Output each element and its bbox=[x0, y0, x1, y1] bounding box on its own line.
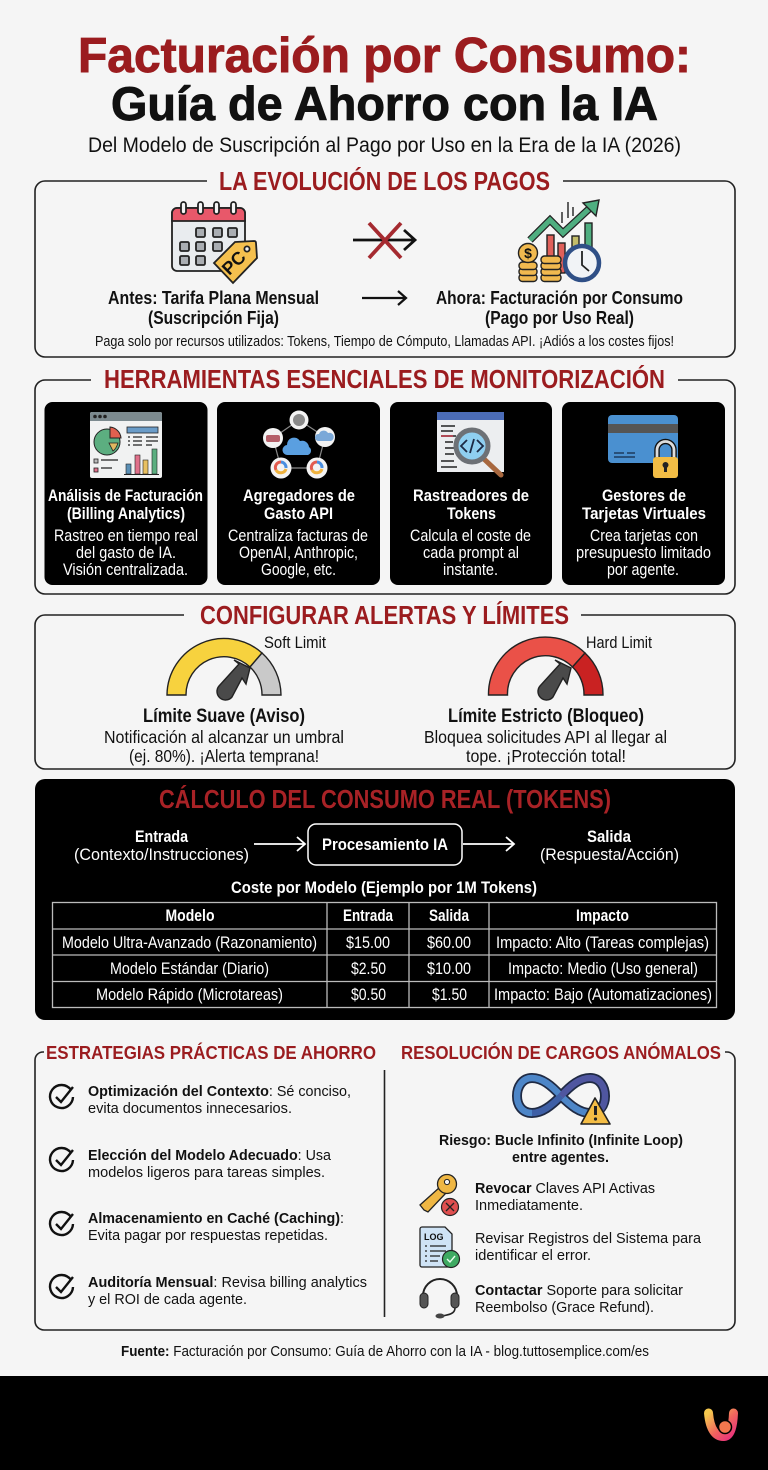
text: riesgo: Riesgo: Bucle Infinito (Infinite Loop) bbox=[439, 1132, 683, 1149]
card text: Rastreo en tiempo real bbox=[54, 527, 198, 545]
title: Guía de Ahorro con la IA bbox=[111, 77, 658, 130]
heading: evolución: LA EVOLUCIÓN DE LOS PAGOS bbox=[219, 166, 550, 196]
icon: log document bbox=[420, 1227, 460, 1268]
heading: estrategias: ESTRATEGIAS PRÁCTICAS DE AHORRO bbox=[46, 1042, 376, 1063]
flow: entrada: Entrada bbox=[135, 827, 188, 846]
card text: del gasto de IA. bbox=[76, 544, 176, 562]
table: coste por modelo bbox=[52, 902, 717, 1008]
flow: salida: Salida bbox=[587, 827, 631, 846]
label: hard limit: Hard Limit bbox=[586, 634, 652, 652]
arrow bbox=[362, 291, 406, 305]
text: ahora bbox=[436, 287, 683, 328]
text: revisar bbox=[475, 1231, 702, 1264]
heading: resolución: RESOLUCIÓN DE CARGOS ANÓMALOS bbox=[401, 1042, 721, 1063]
icon: headset bbox=[420, 1279, 459, 1318]
panel: alertas y límites bbox=[35, 601, 735, 769]
text: límite suave: Límite Suave (Aviso) bbox=[143, 705, 305, 727]
text: límite estricto bbox=[424, 705, 667, 766]
card text: Centraliza facturas de bbox=[228, 527, 368, 545]
table: coste por modelo: $15.00 bbox=[346, 934, 390, 952]
icon: infinite loop with warning bbox=[517, 1078, 610, 1124]
icon: logo bbox=[708, 1413, 734, 1437]
panel: herramientas bbox=[35, 364, 735, 594]
icon: billing dashboard bbox=[90, 412, 162, 478]
text: revocar bbox=[475, 1181, 655, 1214]
card text bbox=[576, 486, 711, 579]
panel: cálculo del consumo bbox=[35, 779, 735, 1020]
card: agregadores bbox=[217, 402, 380, 585]
card text bbox=[48, 486, 203, 579]
card: análisis de facturación bbox=[44, 402, 208, 585]
table: coste por modelo: $2.50 bbox=[351, 960, 386, 978]
strategy text: y el ROI de cada agente. bbox=[88, 1292, 247, 1308]
strategy text bbox=[88, 1211, 344, 1244]
icon: calendar with price tag bbox=[172, 202, 257, 283]
card text: instante. bbox=[443, 561, 498, 579]
card text: OpenAI, Anthropic, bbox=[239, 544, 358, 562]
card text bbox=[410, 486, 531, 579]
icon: check bbox=[50, 1085, 73, 1108]
icon: check bbox=[50, 1212, 73, 1235]
table: coste por modelo: Impacto: Alto (Tareas complejas) bbox=[496, 934, 709, 952]
table: coste por modelo: Modelo Estándar (Diario) bbox=[110, 960, 269, 978]
card text bbox=[228, 486, 368, 579]
table: coste por modelo: Modelo Ultra-Avanzado (Razonamiento) bbox=[62, 934, 317, 952]
text: contactar bbox=[475, 1283, 683, 1316]
strategy: modelo bbox=[50, 1148, 332, 1181]
table: coste por modelo: $0.50 bbox=[351, 986, 386, 1004]
card text: Visión centralizada. bbox=[63, 561, 188, 579]
strategy text: Auditoría Mensual: Revisa billing analytics bbox=[88, 1275, 367, 1291]
table: coste por modelo: Entrada bbox=[343, 907, 394, 925]
text: ahora: (Pago por Uso Real) bbox=[485, 307, 634, 328]
heading: cálculo: CÁLCULO DEL CONSUMO REAL (TOKENS) bbox=[159, 785, 611, 814]
strategy text bbox=[88, 1275, 367, 1308]
gauge: hard limit bbox=[488, 637, 603, 700]
card text: Tarjetas Virtuales bbox=[582, 504, 706, 523]
heading: herramientas: HERRAMIENTAS ESENCIALES DE MONITORIZACIÓN bbox=[104, 364, 665, 394]
icon: chart, coins and clock bbox=[518, 200, 599, 282]
note: Paga solo por recursos utilizados: Tokens, Tiempo de Cómputo, Llamadas API. ¡Adiós a los costes fijos! bbox=[95, 333, 674, 350]
flow: procesamiento: Procesamiento IA bbox=[322, 835, 448, 854]
table heading: Coste por Modelo (Ejemplo por 1M Tokens) bbox=[231, 878, 537, 897]
title bbox=[78, 29, 691, 130]
icon: api aggregator network bbox=[263, 410, 335, 478]
text: límite estricto: tope. ¡Protección total! bbox=[466, 746, 626, 766]
strategy: caché bbox=[50, 1211, 344, 1244]
flow: entrada: (Contexto/Instrucciones) bbox=[74, 845, 249, 864]
flow: salida: (Respuesta/Acción) bbox=[540, 845, 679, 864]
text: antes: Antes: Tarifa Plana Mensual bbox=[108, 287, 319, 308]
text: riesgo: entre agentes. bbox=[512, 1149, 609, 1166]
card text: por agente. bbox=[607, 561, 679, 579]
strategy text: modelos ligeros para tareas simples. bbox=[88, 1165, 325, 1181]
table: coste por modelo: $10.00 bbox=[427, 960, 471, 978]
strategy text: Evita pagar por respuestas repetidas. bbox=[88, 1228, 328, 1244]
icon: key with cancel bbox=[420, 1174, 458, 1216]
strategy: auditoría bbox=[50, 1275, 367, 1308]
panel: la evolución de los pagos bbox=[35, 166, 735, 357]
table: coste por modelo: Impacto: Bajo (Automatizaciones) bbox=[494, 986, 712, 1004]
subtitle: Del Modelo de Suscripción al Pago por Uso en la Era de la IA (2026) bbox=[88, 133, 681, 157]
panel: la evolución de los pagos: $ bbox=[524, 245, 532, 261]
strategy text bbox=[88, 1084, 351, 1117]
card text: Tokens bbox=[447, 504, 496, 523]
strategy text bbox=[88, 1148, 332, 1181]
table: coste por modelo: Modelo Rápido (Microtareas) bbox=[96, 986, 283, 1004]
strategy text: Optimización del Contexto: Sé conciso, bbox=[88, 1084, 351, 1100]
icon: log document: LOG bbox=[424, 1232, 444, 1242]
icon: check bbox=[50, 1275, 73, 1298]
card text: Calcula el coste de bbox=[410, 527, 531, 545]
strategy text: evita documentos innecesarios. bbox=[88, 1101, 292, 1117]
text: límite suave bbox=[104, 705, 344, 766]
source footer: Fuente: Facturación por Consumo: Guía de Ahorro con la IA - blog.tuttosemplice.com/es bbox=[121, 1343, 649, 1360]
text: revisar: identificar el error. bbox=[475, 1248, 591, 1264]
text: límite suave: Notificación al alcanzar un umbral bbox=[104, 727, 344, 747]
card: gestores bbox=[562, 402, 725, 585]
text: límite suave: (ej. 80%). ¡Alerta temprana! bbox=[129, 746, 319, 766]
icon: crossed-out arrow bbox=[353, 223, 415, 258]
text: revisar: Revisar Registros del Sistema para bbox=[475, 1231, 702, 1247]
card text: Gasto API bbox=[264, 504, 333, 523]
card text: Agregadores de bbox=[243, 486, 355, 505]
card text: presupuesto limitado bbox=[576, 544, 711, 562]
icon: locked credit card bbox=[608, 415, 678, 478]
card: rastreadores bbox=[390, 402, 552, 585]
flow: salida bbox=[540, 827, 679, 864]
arrow bbox=[254, 837, 305, 851]
table: coste por modelo: $60.00 bbox=[427, 934, 471, 952]
text: ahora: Ahora: Facturación por Consumo bbox=[436, 287, 683, 308]
strategy text: Almacenamiento en Caché (Caching): bbox=[88, 1211, 344, 1227]
title: Facturación por Consumo: bbox=[78, 29, 691, 83]
table: coste por modelo: Impacto: Medio (Uso general) bbox=[508, 960, 698, 978]
heading: alertas: CONFIGURAR ALERTAS Y LÍMITES bbox=[200, 601, 569, 630]
card text: Google, etc. bbox=[261, 561, 336, 579]
card text: cada prompt al bbox=[423, 544, 519, 562]
text: revocar: Revocar Claves API Activas bbox=[475, 1181, 655, 1197]
gauge: soft limit bbox=[167, 638, 281, 700]
card text: (Billing Analytics) bbox=[67, 504, 185, 523]
text: antes bbox=[108, 287, 319, 328]
table: coste por modelo: Modelo bbox=[166, 907, 214, 925]
flow: procesamiento bbox=[308, 824, 462, 865]
card text: Crea tarjetas con bbox=[590, 527, 698, 545]
card text: Rastreadores de bbox=[413, 486, 529, 505]
flow: entrada bbox=[74, 827, 249, 864]
label: soft limit: Soft Limit bbox=[264, 634, 326, 652]
text: antes: (Suscripción Fija) bbox=[148, 307, 279, 328]
card text: Análisis de Facturación bbox=[48, 486, 203, 505]
black footer band bbox=[0, 1376, 768, 1470]
icon: check bbox=[50, 1148, 73, 1171]
card text: Gestores de bbox=[602, 486, 686, 505]
table: coste por modelo: Impacto bbox=[576, 907, 629, 925]
text: contactar: Contactar Soporte para solicitar bbox=[475, 1283, 683, 1299]
panel: estrategias y resolución bbox=[35, 1042, 735, 1330]
strategy: contexto bbox=[50, 1084, 351, 1117]
text: riesgo bbox=[439, 1132, 683, 1166]
table: coste por modelo: Salida bbox=[429, 907, 470, 925]
text: límite estricto: Bloquea solicitudes API al llegar al bbox=[424, 727, 667, 747]
panel: la evolución de los pagos: PC bbox=[218, 247, 250, 279]
arrow bbox=[463, 837, 514, 851]
text: revocar: Inmediatamente. bbox=[475, 1198, 583, 1214]
text: contactar: Reembolso (Grace Refund). bbox=[475, 1300, 654, 1316]
strategy text: Elección del Modelo Adecuado: Usa bbox=[88, 1148, 332, 1164]
icon: code magnifier bbox=[437, 412, 504, 475]
text: límite estricto: Límite Estricto (Bloqueo) bbox=[448, 705, 644, 727]
table: coste por modelo: $1.50 bbox=[432, 986, 467, 1004]
